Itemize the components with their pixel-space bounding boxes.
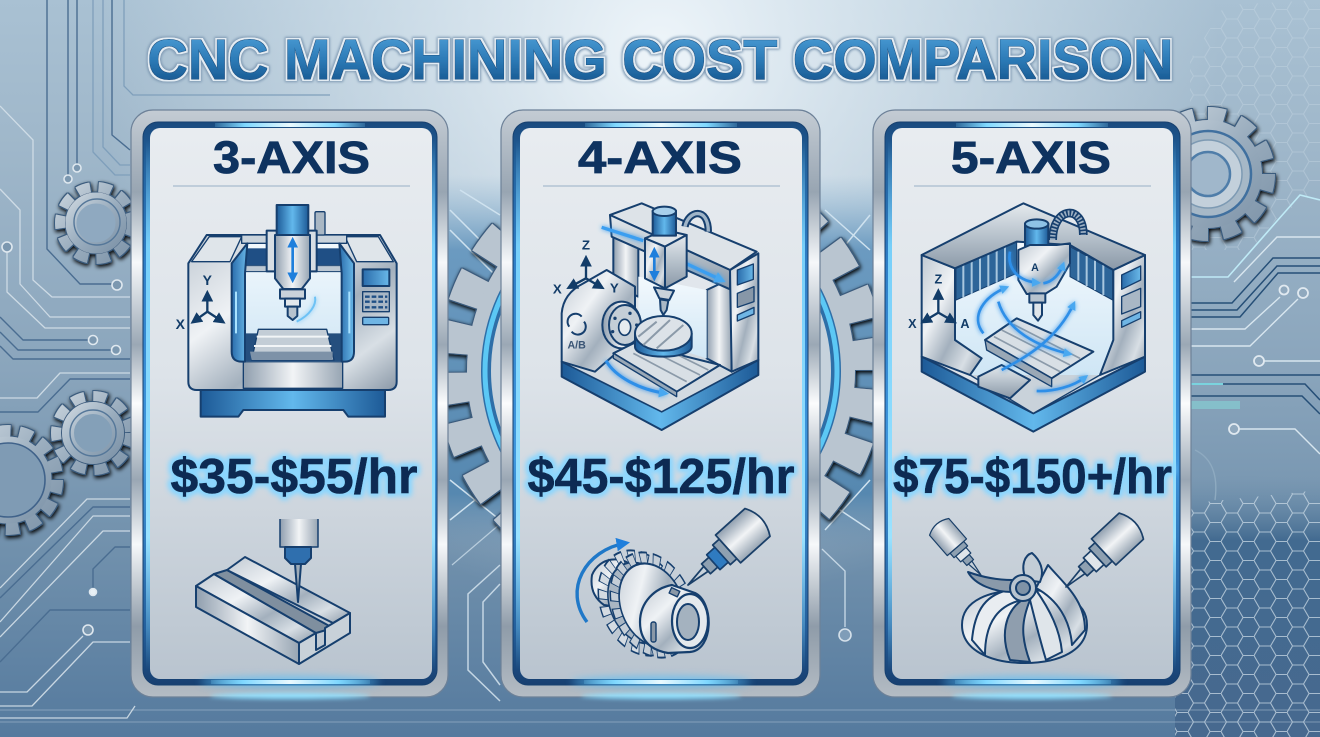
cyan side strips 5-axis <box>888 140 1176 670</box>
center background gear <box>423 133 899 701</box>
icon: 5-axis machine: X <box>908 317 917 331</box>
icon: gear part with tool <box>577 505 774 662</box>
icon: 4-axis machine: X <box>553 281 562 296</box>
top glow bar 4-axis <box>585 123 737 127</box>
panel: 3-axis <box>131 110 448 699</box>
icon: 4-axis machine: Z <box>582 237 590 252</box>
bottom glow bar 4-axis <box>571 676 751 699</box>
icon: 5-axis machine: A <box>960 317 970 331</box>
bottom glow bar 3-axis <box>200 676 380 699</box>
inner blue border 4-axis <box>513 122 808 685</box>
content surface 5-axis <box>892 128 1173 679</box>
price: 5-axis: $75-$150+/hr <box>893 450 1172 504</box>
circuit traces left <box>0 0 330 718</box>
gears left <box>0 187 132 529</box>
icon: 3-axis machine: X <box>176 316 186 332</box>
metal frame 3-axis <box>131 110 448 697</box>
icon: 4-axis machine <box>553 203 758 430</box>
metal frame 5-axis <box>873 110 1191 697</box>
cyan side strips 4-axis <box>516 140 805 670</box>
heading: 4-axis: 4-AXIS <box>578 132 742 183</box>
icon: 5-axis machine <box>908 203 1145 432</box>
title: CNC MACHINING COST COMPARISON <box>148 28 1174 92</box>
metal frame 4-axis <box>501 110 820 697</box>
icon: 3-axis machine: Y <box>203 272 213 288</box>
icon: impeller with two tools <box>927 509 1147 663</box>
cyan side strips 3-axis <box>146 140 435 670</box>
icon: 5-axis machine: A <box>1031 262 1039 274</box>
circuit traces right <box>1190 195 1320 500</box>
heading: 3-axis: 3-AXIS <box>213 132 370 183</box>
bottom glow bar 5-axis <box>942 676 1122 699</box>
icon: milled slot block <box>196 519 350 664</box>
icon: 5-axis machine: Z <box>934 272 942 286</box>
icon: 3-axis machine <box>176 205 397 417</box>
inner blue border 3-axis <box>143 122 437 685</box>
icon: 4-axis machine: A/B <box>567 339 586 351</box>
price: 3-axis: $35-$55/hr <box>170 450 418 504</box>
top glow bar 3-axis <box>215 123 365 127</box>
panel: 4-axis <box>501 110 820 699</box>
icon: 4-axis machine: Y <box>610 281 619 296</box>
panel: 5-axis <box>873 110 1191 699</box>
content surface 3-axis <box>150 128 432 679</box>
price: 4-axis: $45-$125/hr <box>528 450 794 504</box>
content surface 4-axis <box>520 128 802 679</box>
gear right <box>1148 114 1268 234</box>
inner blue border 5-axis <box>885 122 1180 685</box>
heading: 5-axis: 5-AXIS <box>951 132 1111 183</box>
top glow bar 5-axis <box>956 123 1108 127</box>
